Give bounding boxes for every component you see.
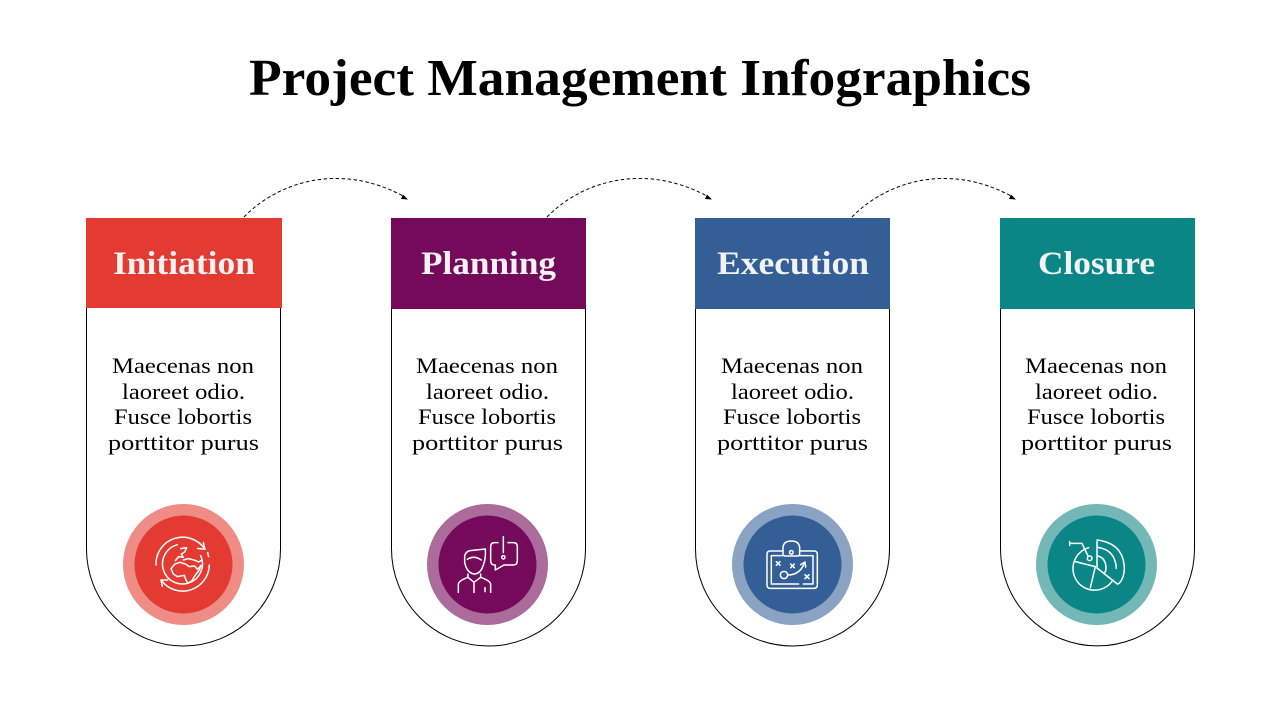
text block: initiation: Fusce lobortis [114,404,252,429]
header: planning [391,218,586,309]
text block: planning [412,353,563,455]
title: Project Management Infographics [249,50,1031,107]
header: execution: Execution [717,246,869,282]
text block: planning: porttitor purus [412,430,563,455]
header: initiation: Initiation [113,246,255,282]
icon: strategy clipboard [732,504,853,625]
icon: radar chart [1036,504,1157,625]
header: closure: Closure [1038,246,1155,282]
text block: closure: Fusce lobortis [1027,404,1165,429]
header: initiation [86,218,282,308]
text block: execution: Fusce lobortis [723,404,861,429]
panel: closure [1000,218,1195,646]
text block: closure: Maecenas non [1025,353,1167,378]
header: planning: Planning [421,246,557,282]
arrow: initiation to planning [244,178,408,217]
text block: execution: Maecenas non [721,353,863,378]
text block: execution [717,353,868,455]
panel: planning [391,218,586,646]
text block: closure: porttitor purus [1021,430,1172,455]
text block: initiation: porttitor purus [108,430,259,455]
text block: execution: porttitor purus [717,430,868,455]
text block: planning: Maecenas non [416,353,558,378]
text block: initiation: Maecenas non [112,353,254,378]
header: closure [1000,218,1195,309]
panel: initiation [86,218,282,646]
text block: closure: laoreet odio. [1035,379,1158,404]
text block: planning: laoreet odio. [426,379,549,404]
panel: execution [695,218,890,646]
icon: rotating globe [123,504,244,625]
header: execution [695,218,890,309]
arrow: planning to execution [547,178,712,217]
text block: planning: Fusce lobortis [418,404,556,429]
arrow: execution to closure [852,178,1016,217]
text block: initiation [108,353,259,455]
text block: initiation: laoreet odio. [122,379,245,404]
icon: person with alert speech bubble [427,504,548,625]
text block: closure [1021,353,1172,455]
text block: execution: laoreet odio. [731,379,854,404]
